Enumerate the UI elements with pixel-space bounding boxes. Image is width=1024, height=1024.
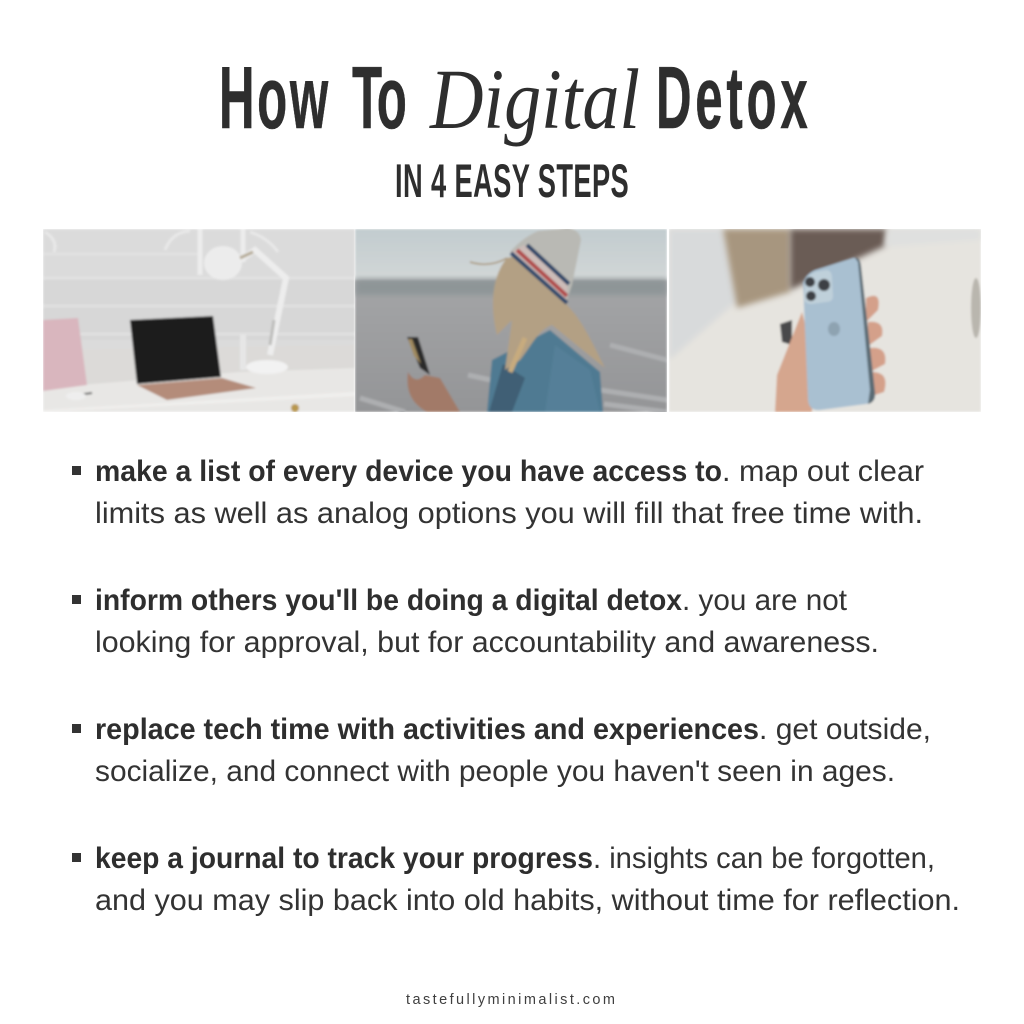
title: How: [219, 49, 329, 148]
step 2: [72, 584, 879, 659]
step 1: . map out clear: [722, 455, 924, 488]
step 3: . get outside,: [759, 713, 931, 746]
step 4: keep a journal to track your progress: [95, 842, 593, 875]
title: Digital: [429, 51, 640, 147]
photo: desk with laptop and lamp: [43, 229, 355, 412]
photo: hand holding blue phone: [669, 229, 981, 412]
bullet: [72, 853, 81, 862]
step 3: replace tech time with activities and experiences: [95, 713, 759, 746]
step 4: and you may slip back into old habits, without time for reflection.: [95, 884, 960, 917]
step 2: . you are not: [682, 584, 847, 617]
bullet: [72, 724, 81, 733]
step 3: socialize, and connect with people you haven't seen in ages.: [95, 755, 895, 788]
step 4: [72, 842, 960, 917]
title: Detox: [656, 49, 808, 148]
step 4: . insights can be forgotten,: [593, 842, 935, 875]
bullet: [72, 466, 81, 475]
step 3: [72, 713, 931, 788]
step 1: make a list of every device you have access to: [95, 455, 722, 488]
step 1: [72, 455, 924, 530]
step 1: limits as well as analog options you will fill that free time with.: [95, 497, 923, 530]
title: To: [352, 49, 407, 148]
title: [219, 49, 808, 148]
footer url: tastefullyminimalist.com: [406, 992, 615, 1008]
photo: woman in beanie looking at phone: [355, 228, 667, 412]
step 2: inform others you'll be doing a digital detox: [95, 584, 683, 617]
step 2: looking for approval, but for accountability and awareness.: [95, 626, 879, 659]
bullet: [72, 595, 81, 604]
subtitle: IN 4 EASY STEPS: [395, 155, 629, 208]
